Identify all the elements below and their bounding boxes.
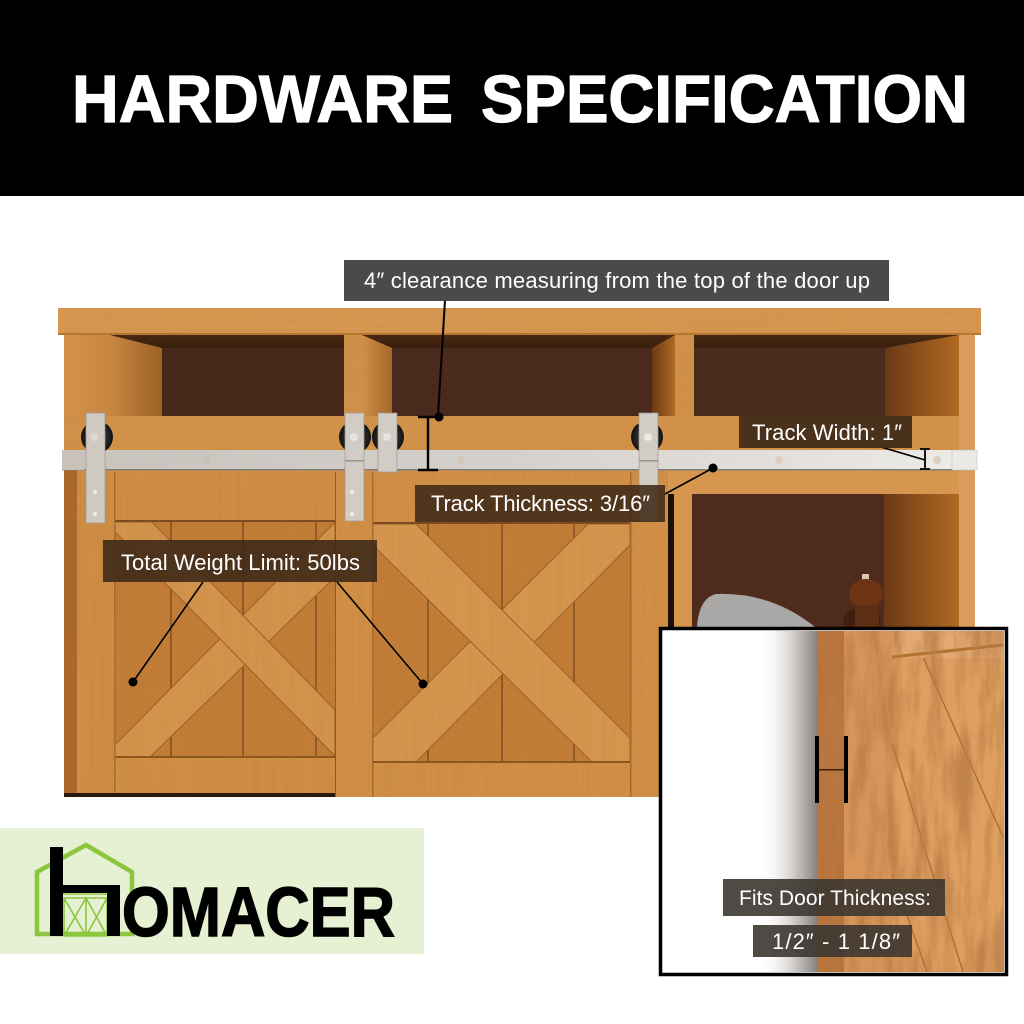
- right door: [335, 472, 668, 797]
- header band: [0, 0, 1024, 196]
- lower rail: [668, 470, 960, 494]
- upper left shelf: [64, 335, 344, 416]
- icon: green barn doors: [60, 894, 110, 936]
- callout: track width: Track Width: 1″: [752, 420, 902, 445]
- middle rail: [110, 416, 959, 450]
- callout: clearance: 4″ clearance measuring from the top of the door up: [364, 268, 870, 293]
- cabinet: [58, 308, 981, 797]
- right track stop: [952, 450, 977, 470]
- callout: weight limit: Total Weight Limit: 50lbs: [121, 550, 360, 575]
- door shadow: [758, 631, 818, 972]
- track rail: [62, 450, 977, 470]
- callout: weight limit: [103, 540, 428, 688]
- cabinet top board: [58, 308, 981, 334]
- upper middle shelf: [362, 335, 675, 416]
- callout: track width: [739, 416, 930, 469]
- lower right compartment: [668, 470, 975, 629]
- inset frame: [660, 628, 1006, 974]
- left door panel: [115, 521, 335, 757]
- X brace: [373, 524, 630, 762]
- upper right shelf: [694, 335, 959, 416]
- icon: green house outline: [37, 845, 132, 934]
- title: HARDWARE: [72, 62, 453, 137]
- label: fits door thickness: [723, 879, 945, 916]
- callout: track thickness: Track Thickness: 3/16″: [431, 491, 650, 516]
- inset: door thickness: [660, 628, 1006, 974]
- hanger 4: [631, 413, 663, 521]
- left track stop: [62, 450, 84, 470]
- thickness marker: [815, 736, 848, 803]
- left edge: [64, 470, 77, 797]
- right door panel: [373, 524, 630, 762]
- bowl: [697, 594, 815, 627]
- door edge: [818, 631, 844, 972]
- hanger 2: [339, 413, 371, 521]
- title: SPECIFICATION: [481, 62, 968, 137]
- icon: H letter: [50, 847, 120, 936]
- left door: [77, 472, 335, 793]
- door face: [892, 631, 1004, 972]
- callout: track thickness: [415, 464, 718, 522]
- hanger 1: [81, 413, 113, 523]
- hanger 3: [372, 413, 404, 472]
- label: thickness range: 1/2″ - 1 1/8″: [772, 929, 900, 954]
- cabinet body: [64, 335, 975, 797]
- logo: [0, 828, 424, 954]
- wordmark: OMACER: [122, 873, 395, 951]
- callout: clearance: [344, 260, 889, 470]
- pepper mill: [843, 574, 883, 632]
- label: fits door thickness: Fits Door Thickness:: [739, 887, 931, 910]
- X brace: [115, 522, 335, 757]
- label: thickness range: [753, 925, 912, 957]
